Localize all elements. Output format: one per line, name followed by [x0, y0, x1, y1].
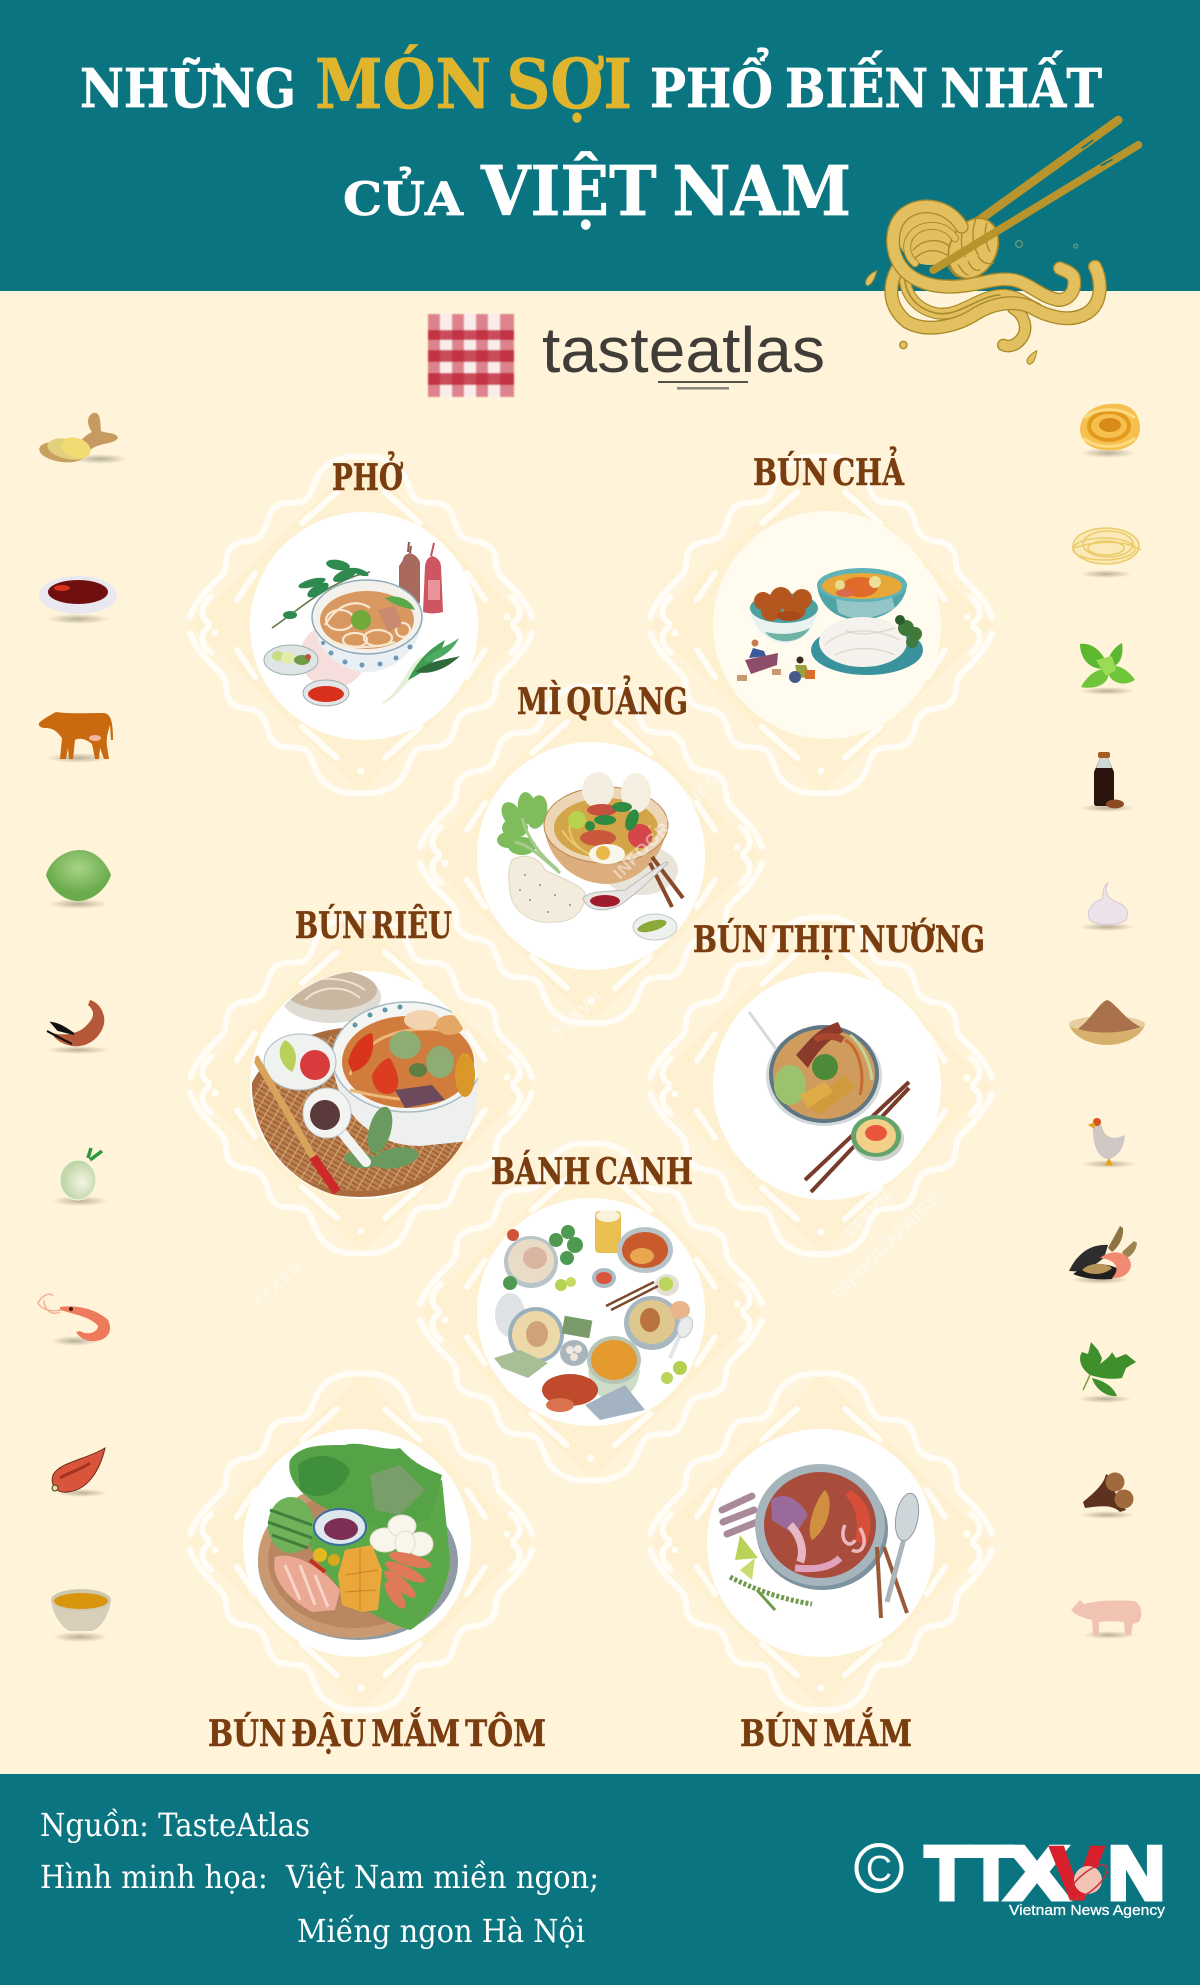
faint watermarks: TTXVN [249, 1256, 306, 1313]
plate [477, 1198, 705, 1426]
label: BÁNH CANH [491, 1151, 693, 1193]
source text: Miếng ngon Hà Nội [297, 1912, 585, 1950]
pork [274, 1556, 340, 1612]
spoon [340, 1130, 366, 1162]
plate [243, 1429, 471, 1657]
lettuce [497, 791, 550, 855]
label: MÌ QUẢNG [517, 676, 688, 723]
icon: cow [39, 712, 113, 763]
dish: Bún mắm [650, 1374, 992, 1755]
lime [735, 1535, 758, 1560]
source text: Hình minh họa: Việt Nam miền ngon; [40, 1858, 599, 1896]
logo: TTXVN: Vietnam News Agency [1009, 1902, 1166, 1919]
icon: shallot [52, 1448, 108, 1497]
decorative frame [190, 917, 532, 1253]
title: CỦA [343, 165, 464, 226]
logo: tasteatlas [428, 314, 825, 397]
decorative frame [190, 1374, 532, 1710]
noodle plate [811, 625, 923, 675]
shrimp rolls [381, 1549, 433, 1612]
icon: yellow noodle nest [1080, 404, 1140, 458]
shadow wash [602, 845, 678, 895]
chopsticks [877, 1547, 907, 1618]
label: BÚN THỊT NƯỚNG [693, 919, 985, 961]
dish: Bún đậu mắm tôm [190, 1374, 546, 1755]
icon: lime [46, 850, 111, 909]
tofu [370, 1515, 433, 1556]
cloth [585, 1385, 645, 1420]
sauce dish [852, 1117, 904, 1161]
icon: garlic [1079, 883, 1135, 931]
illustration [494, 1210, 695, 1420]
spoon [887, 1535, 905, 1602]
dish: Mì Quảng [420, 676, 762, 1023]
plate [477, 742, 705, 970]
title [80, 43, 1102, 232]
title: NHỮNG [80, 56, 296, 120]
icon: parsley [1078, 1342, 1136, 1403]
label: BÚN CHẢ [753, 447, 905, 494]
dip bowl [314, 1509, 366, 1545]
title: VIỆT NAM [480, 151, 851, 232]
logo: TTXVN [925, 1831, 1166, 1919]
small dishes [592, 1268, 616, 1288]
bowl B [617, 1227, 673, 1273]
copyright mark: C [866, 1848, 892, 1889]
footer band [0, 1774, 1200, 1985]
dish: Bún chả [650, 447, 992, 793]
dish: Bánh canh [420, 1144, 762, 1480]
chopsticks [255, 1057, 313, 1157]
top bowl [281, 971, 381, 1023]
chopsticks [606, 1282, 658, 1310]
icon: noodles and chopsticks [866, 120, 1138, 364]
steam [495, 1293, 525, 1337]
lime wedges [661, 1372, 673, 1384]
decorative frame [190, 457, 532, 793]
faint watermarks: INFOGRAPHICS [829, 1189, 943, 1303]
illustration [749, 1012, 909, 1192]
logo: TTXVN: N [1108, 1831, 1165, 1915]
plate [713, 511, 941, 739]
bowl [544, 825, 667, 884]
decorative frame [650, 457, 992, 793]
icon: onion [52, 1148, 108, 1206]
icon: chicken [1081, 1118, 1137, 1168]
chopsticks [650, 857, 683, 907]
bowl D [508, 1307, 564, 1363]
plate [713, 972, 941, 1200]
title: PHỔ BIẾN NHẤT [650, 46, 1102, 120]
illustration [497, 772, 683, 940]
herbs [289, 1444, 442, 1530]
faint watermarks [249, 769, 943, 1313]
icon: ginger [38, 413, 128, 465]
scallion [383, 651, 447, 704]
meat bowl [750, 608, 818, 643]
crab [542, 1374, 598, 1406]
plate [250, 971, 478, 1199]
soup bowl [817, 585, 907, 620]
illustration [258, 1444, 458, 1640]
fishball dish [560, 1340, 588, 1366]
big bowl [334, 1072, 478, 1146]
source text [40, 1806, 599, 1950]
dish: Phở [190, 452, 532, 793]
herb [730, 1577, 812, 1604]
source text: Nguồn: TasteAtlas [40, 1806, 310, 1844]
ingredient column: left [38, 413, 128, 1642]
icon: soy sauce bottle [1079, 752, 1135, 812]
icon: sauce dish [39, 576, 117, 624]
leaves [344, 1106, 419, 1169]
ingredient column: right [1069, 404, 1145, 1639]
faint watermarks: TTXVN [549, 986, 606, 1043]
label: BÚN ĐẬU MẮM TÔM [208, 1708, 546, 1755]
dish: Bún riêu [190, 905, 532, 1253]
logo: TTXVN: X [1006, 1831, 1068, 1915]
spoon [583, 862, 668, 910]
side dish [264, 1034, 336, 1090]
bowl E [588, 1370, 640, 1400]
icon: soup bowl [51, 1589, 111, 1642]
sauce bottles [408, 542, 411, 553]
bowl [756, 1470, 888, 1590]
decorative frame [420, 687, 762, 1023]
icon: shrimp [38, 1294, 110, 1346]
title: MÓN SỢI [315, 43, 632, 125]
illustration [264, 542, 460, 706]
logo: TTXVN: V [1050, 1831, 1104, 1915]
label: PHỞ [332, 452, 403, 499]
bowl [766, 1026, 882, 1126]
bowl [312, 617, 423, 672]
rice crackers [509, 856, 585, 922]
lime dish [264, 645, 318, 675]
label: BÚN MẮM [740, 1708, 912, 1755]
icon: seafood mix [1069, 1226, 1137, 1284]
plate [707, 1429, 935, 1657]
logo: TTXVN: TT [925, 1831, 1013, 1915]
beer glass [595, 1211, 621, 1253]
chili dish [303, 680, 349, 706]
banana leaf packets [562, 1316, 592, 1338]
purple vegetables [722, 1496, 757, 1534]
bowl A [504, 1236, 558, 1288]
cucumbers [268, 1497, 314, 1553]
icon: pig [1071, 1600, 1141, 1639]
icon: crab claw [46, 1000, 110, 1054]
dish: Bún thịt nướng [650, 918, 992, 1254]
herbs [503, 1225, 583, 1290]
chopsticks [805, 1082, 909, 1192]
illustration [722, 1464, 922, 1618]
bowl C [624, 1296, 680, 1350]
faint watermarks: TTXVN [839, 1186, 896, 1243]
decorative frame [650, 1374, 992, 1710]
illustration [248, 970, 484, 1194]
plate [250, 512, 478, 740]
chili and kumquats [313, 1548, 327, 1562]
fried tofu [338, 1545, 382, 1612]
icon: mint [1079, 643, 1135, 695]
logo: tasteatlas: tasteatlas [542, 314, 825, 386]
spoon [670, 1330, 682, 1358]
decorative frame [420, 1144, 762, 1480]
icon: cloves [1079, 1472, 1135, 1519]
illustration [737, 568, 923, 683]
header band [0, 0, 1200, 291]
faint watermarks: INFOGRAPHICS [609, 769, 723, 883]
icon: pale noodles [1073, 528, 1141, 578]
icon: spice powder bowl [1069, 1000, 1145, 1045]
pepper dish [633, 914, 677, 940]
tray [258, 1484, 458, 1640]
copyright mark [856, 1845, 902, 1891]
decorative frame [650, 918, 992, 1254]
label: BÚN RIÊU [295, 905, 452, 947]
tiny vendors [745, 653, 778, 674]
spoon [749, 1012, 788, 1065]
